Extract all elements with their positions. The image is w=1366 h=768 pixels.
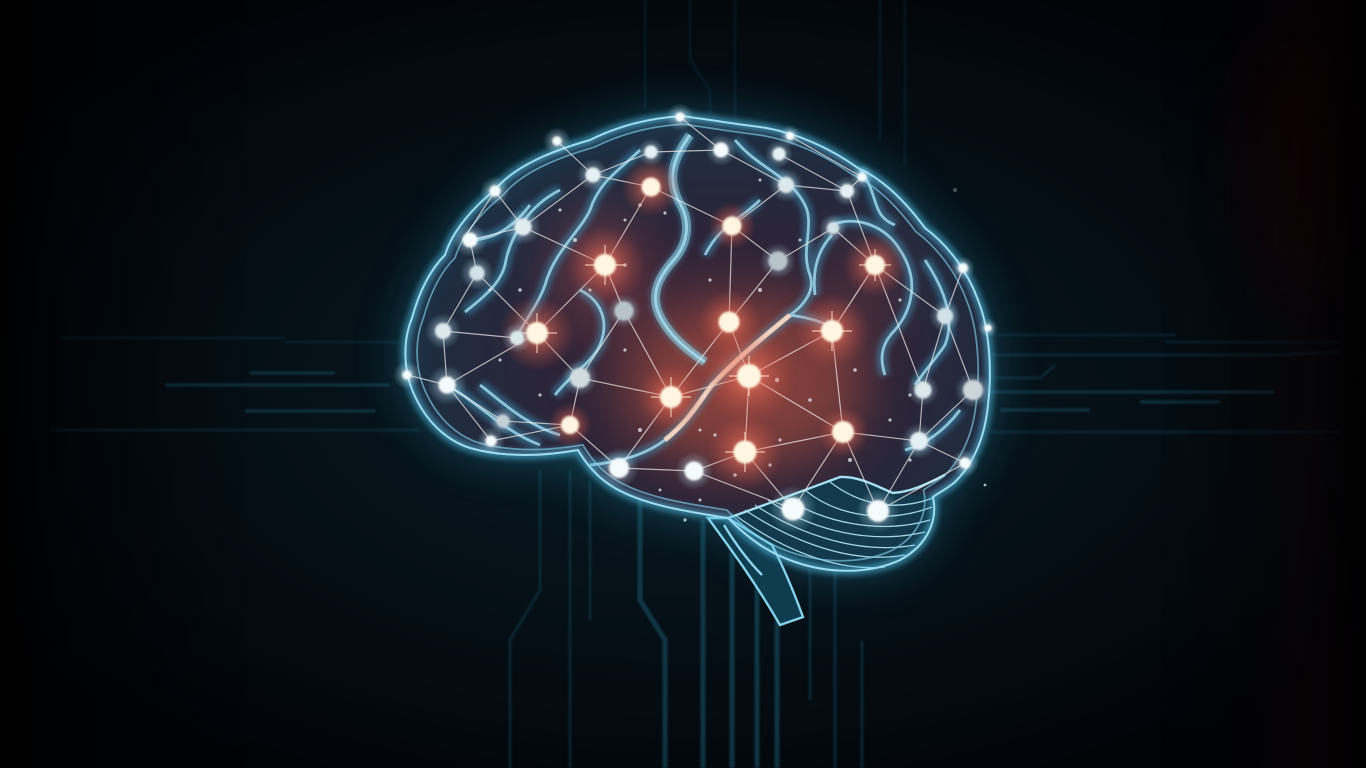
brain outline: [405, 116, 990, 571]
background: faint red tint upper right: [1240, 40, 1360, 300]
cerebellum fill: [728, 477, 934, 571]
node cores: [402, 112, 992, 522]
left traces: [50, 338, 420, 430]
upper traces: [645, 0, 905, 165]
lower traces: [510, 470, 862, 768]
outer halo: [405, 116, 990, 571]
small speckles: [488, 178, 986, 522]
node halos: [393, 103, 998, 533]
cool nodes: [393, 103, 998, 533]
warm core glow: [625, 300, 865, 470]
inner contour: [417, 124, 978, 561]
node halos: [499, 157, 907, 490]
right traces: [990, 335, 1340, 432]
brain stem: [708, 518, 803, 625]
brain folds: [445, 135, 960, 465]
cerebrum lower edge over cerebellum: [728, 475, 945, 518]
node flares: [517, 245, 891, 472]
node cores: [526, 178, 885, 464]
network links: [407, 117, 973, 511]
cerebellum lines: [735, 482, 933, 568]
warm nodes: [499, 157, 907, 490]
brain body: [405, 116, 990, 571]
